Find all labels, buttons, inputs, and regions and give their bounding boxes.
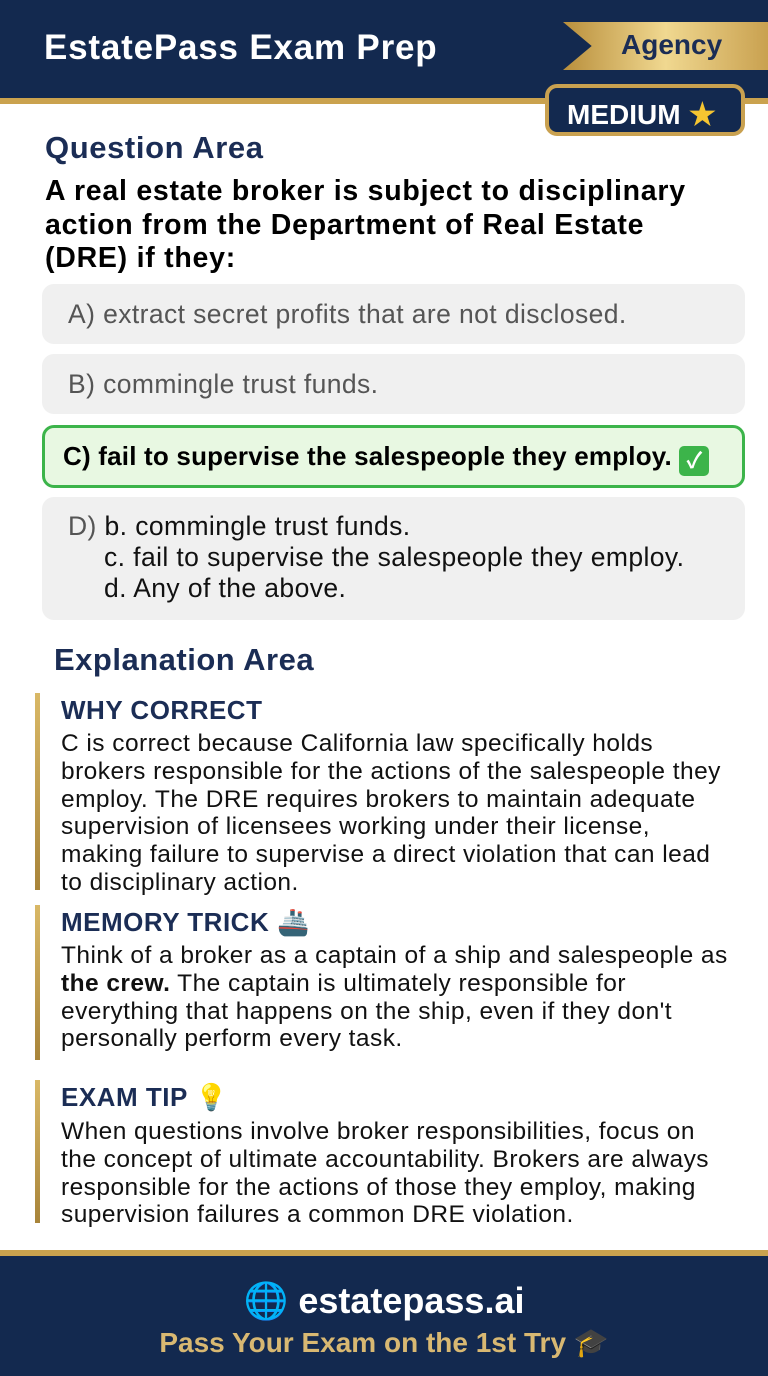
header — [0, 0, 768, 104]
text: why correct: supervision of licensees working under their license, — [61, 813, 650, 840]
text: memory trick: the crew. The captain is ultimately responsible for — [61, 970, 626, 997]
text: exam tip — [61, 1118, 709, 1228]
ribbon: Agency — [563, 22, 768, 70]
question text: (DRE) if they: — [45, 242, 236, 274]
badge: MEDIUM — [545, 84, 745, 136]
option C correct: ✓ — [686, 448, 702, 473]
question text: action from the Department of Real Estate — [45, 208, 644, 240]
option D: c. fail to supervise the salespeople they employ. — [104, 542, 684, 572]
text: exam tip: When questions involve broker responsibilities, focus on — [61, 1118, 695, 1145]
text: memory trick: personally perform every task. — [61, 1025, 403, 1052]
text: exam tip: the concept of ultimate accountability. Brokers are always — [61, 1146, 709, 1173]
section: memory trick — [35, 905, 728, 1060]
ribbon: Agency: Agency — [621, 29, 722, 60]
option D: D) b. commingle trust funds. — [68, 511, 411, 541]
text: why correct: to disciplinary action. — [61, 869, 299, 896]
option C correct — [42, 425, 745, 488]
badge: MEDIUM: MEDIUM ★ — [567, 99, 716, 130]
tagline: Pass Your Exam on the 1st Try 🎓 — [159, 1327, 609, 1358]
option B: B) commingle trust funds. — [68, 369, 378, 399]
option A: A) extract secret profits that are not disclosed. — [68, 299, 627, 329]
question text: A real estate broker is subject to disciplinary — [45, 175, 686, 207]
option D — [42, 497, 745, 620]
footer — [0, 1250, 768, 1376]
text: memory trick: Think of a broker as a captain of a ship and salespeople as — [61, 942, 728, 969]
option C correct: C) fail to supervise the salespeople they employ. — [63, 441, 672, 471]
option A — [42, 284, 745, 344]
text: memory trick: everything that happens on the ship, even if they don't — [61, 998, 672, 1025]
heading: exam tip: EXAM TIP 💡 — [61, 1082, 228, 1112]
text: memory trick — [61, 942, 728, 1052]
title: EstatePass Exam Prep — [44, 28, 437, 67]
text: exam tip: responsible for the actions of those they employ, making — [61, 1174, 696, 1201]
text: why correct — [61, 730, 721, 896]
section: exam tip — [35, 1080, 709, 1228]
heading: memory trick: MEMORY TRICK 🚢 — [61, 907, 310, 937]
text: why correct: employ. The DRE requires brokers to maintain adequate — [61, 786, 695, 813]
heading: why correct: WHY CORRECT — [61, 695, 262, 725]
section: why correct — [35, 693, 721, 896]
heading: Question Area: Question Area — [45, 130, 264, 165]
text: why correct: brokers responsible for the actions of the salespeople they — [61, 758, 721, 785]
heading: Explanation Area: Explanation Area — [54, 642, 314, 677]
text: why correct: making failure to supervise a direct violation that can lead — [61, 841, 710, 868]
text: why correct: C is correct because California law specifically holds — [61, 730, 653, 757]
footer url: 🌐 estatepass.ai — [244, 1280, 524, 1321]
text: exam tip: supervision failures a common DRE violation. — [61, 1201, 574, 1228]
question text — [45, 175, 686, 274]
option B — [42, 354, 745, 414]
option D: d. Any of the above. — [104, 573, 346, 603]
